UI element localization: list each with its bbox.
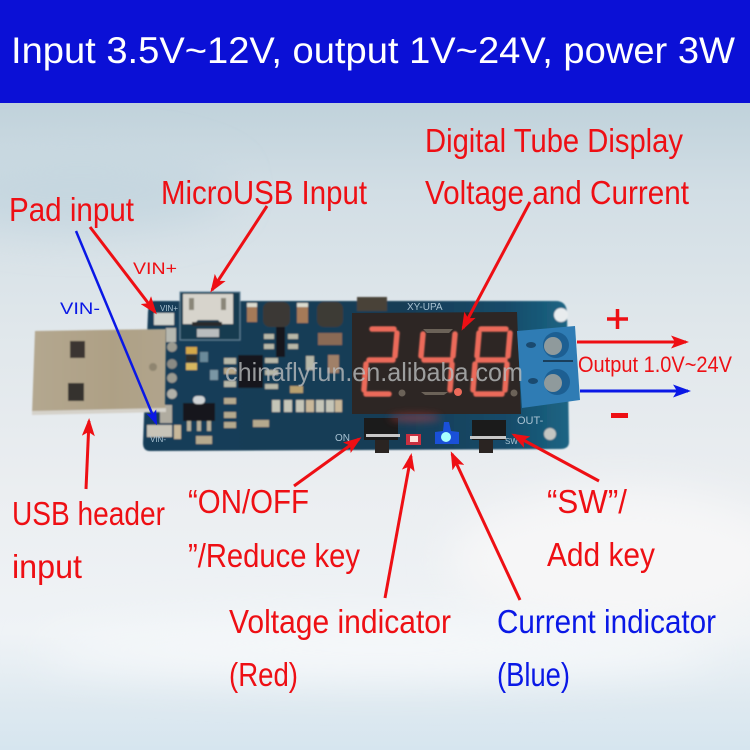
VIN pads <box>147 313 177 437</box>
label: digital tube display: Digital Tube Display <box>425 122 683 159</box>
terminal block <box>517 326 580 408</box>
arrow: SW key <box>514 435 599 481</box>
SW button <box>470 420 506 453</box>
label: ON/OFF: “ON/OFF <box>188 483 309 520</box>
board silk labels: SW <box>505 437 518 446</box>
label: VIN+: VIN+ <box>133 259 177 278</box>
red LED <box>389 414 441 445</box>
watermark: chinaflyfun.en.alibaba.com <box>225 357 523 387</box>
buttons and indicator LEDs <box>364 414 506 453</box>
label: voltage indicator: Voltage indicator <box>229 603 451 640</box>
board silk labels <box>150 302 544 446</box>
label: voltage and current: Voltage and Current <box>425 174 689 211</box>
blue LED <box>435 422 459 444</box>
label: blue: (Blue) <box>497 656 570 693</box>
label: USB header: USB header <box>12 495 165 532</box>
title banner <box>0 0 750 103</box>
arrow: ON/OFF key <box>294 439 359 486</box>
digital tube display <box>352 312 521 414</box>
label: reduce key: ”/Reduce key <box>188 537 360 574</box>
label: minus <box>611 413 628 418</box>
label: pad input: Pad input <box>9 191 134 228</box>
arrow: VIN- <box>76 231 156 423</box>
arrow: USB header <box>86 421 89 489</box>
arrow: current indicator <box>452 454 520 600</box>
label: red: (Red) <box>229 656 298 693</box>
label: current indicator: Current indicator <box>497 603 716 640</box>
board silk labels: OUT- <box>517 415 544 427</box>
board silk labels: XY-UPA <box>407 302 443 313</box>
board silk labels: VIN+ <box>160 304 178 313</box>
digit 4 <box>421 334 455 390</box>
arrow: voltage indicator <box>385 456 411 598</box>
unlit segments <box>398 329 518 396</box>
arrow: output plus <box>577 340 686 344</box>
label: plus <box>607 309 628 329</box>
arrow: display <box>463 202 530 328</box>
board silk labels: VIN- <box>150 435 166 444</box>
circuit board <box>143 292 569 451</box>
label: input: input <box>12 548 82 585</box>
label: SW: “SW”/ <box>547 483 628 520</box>
decimal point <box>454 388 462 396</box>
board components <box>174 292 568 444</box>
label: VIN-: VIN- <box>60 299 100 318</box>
digit 0 <box>473 329 510 394</box>
board silk labels: ON <box>335 433 350 444</box>
digit 2 <box>364 329 397 394</box>
arrow: output minus <box>580 390 688 392</box>
arrow: pad input to VIN+ <box>90 227 155 312</box>
label: output range: Output 1.0V~24V <box>578 352 732 377</box>
title banner: Input 3.5V~12V, output 1V~24V, power 3W <box>11 30 735 71</box>
label: add key: Add key <box>547 536 655 573</box>
arrow: MicroUSB <box>212 206 267 290</box>
label: MicroUSB input: MicroUSB Input <box>161 174 367 211</box>
ON/OFF button <box>364 418 400 453</box>
USB plug <box>32 329 166 415</box>
